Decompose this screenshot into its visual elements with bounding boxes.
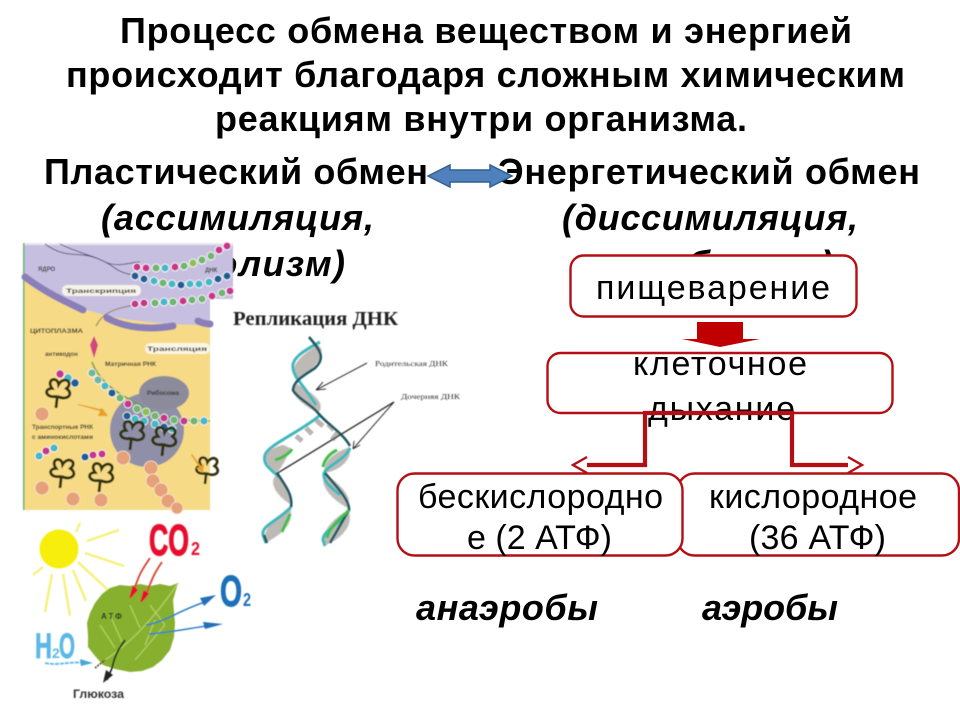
image: photosynthesis leaf: 2 [52, 645, 60, 661]
image: photosynthesis leaf: O [59, 627, 75, 666]
red arrows [134, 558, 162, 598]
dark strands [264, 337, 350, 543]
green daughter strands [275, 449, 349, 538]
oxygen arrows [146, 602, 215, 634]
connector arrows [573, 413, 862, 473]
bead rows [131, 242, 234, 308]
box: oxygen-free: бескислородно [418, 478, 663, 516]
label: aerobes: аэробы [702, 587, 838, 628]
nucleus [24, 243, 233, 325]
box: oxygen-free [398, 474, 682, 557]
labels: ЯДРО [38, 267, 56, 273]
image: photosynthesis leaf: 2 [191, 539, 200, 559]
image: protein synthesis: ДНК [205, 268, 218, 274]
oxygen label: O [220, 567, 242, 616]
tRNA [47, 379, 70, 408]
title: Процесс обмена веществом и энергией [120, 10, 852, 51]
pink arrow [90, 336, 98, 358]
image: photosynthesis leaf: АТФ [101, 612, 122, 621]
label arrows [276, 363, 394, 474]
water label: H [35, 627, 52, 666]
sun [40, 530, 78, 568]
heading: plastic exchange: анаболизм) [126, 243, 345, 284]
heading: plastic exchange: Пластический обмен [44, 151, 428, 192]
image: protein synthesis: Матричная РНК [105, 362, 156, 368]
box: oxygen-free: е (2 АТФ) [467, 519, 612, 557]
title: реакциям внутри организма. [215, 98, 747, 139]
water arrow [45, 663, 85, 664]
carbon dioxide label: CO [149, 516, 189, 565]
heading: energy exchange [498, 151, 920, 284]
box: digestion: пищеварение [596, 269, 830, 307]
helix lobes [265, 345, 350, 545]
title: происходит благодаря сложным химическим [66, 54, 905, 95]
orange arrows [78, 404, 108, 416]
ribosome [110, 393, 184, 467]
image: protein synthesis [23, 242, 234, 514]
image: DNA replication [233, 308, 460, 546]
image: protein synthesis: Транспортные РНК [32, 425, 93, 431]
box: cellular respiration: клеточное [633, 345, 807, 383]
mRNA [92, 362, 210, 421]
double arrow [428, 165, 512, 187]
image: protein synthesis: с аминокислотами [32, 435, 93, 441]
label: anaerobes: анаэробы [416, 587, 598, 628]
teal strands [263, 342, 350, 546]
title [66, 10, 905, 139]
image: protein synthesis: ЦИТОПЛАЗМА [30, 329, 84, 335]
heading: plastic exchange [44, 151, 428, 284]
box: oxygen [678, 474, 959, 557]
box: oxygen: кислородное [709, 478, 917, 516]
box: digestion [570, 256, 856, 316]
leaf [87, 583, 178, 672]
glucose arrow [107, 640, 125, 680]
image: DNA replication: Дочерняя ДНК [401, 393, 460, 401]
heading: plastic exchange: (ассимиляция, [101, 197, 374, 238]
box: cellular respiration [548, 345, 892, 428]
image: protein synthesis: антикодон [45, 352, 78, 358]
image: protein synthesis: Рибосома [147, 390, 180, 397]
box: cellular respiration: дыхание [648, 390, 795, 428]
glucose label: Глюкоза [73, 687, 124, 701]
image: DNA replication: Родительская ДНК [375, 360, 448, 368]
box: oxygen: (36 АТФ) [749, 519, 886, 557]
sun rays [33, 523, 124, 616]
heading: energy exchange: (диссимиляция, [562, 197, 858, 238]
caption: Репликация ДНК [233, 308, 399, 330]
image: protein synthesis: Трансляция [147, 347, 208, 353]
image: photosynthesis leaf: 2 [243, 590, 251, 610]
amino acids [35, 407, 183, 514]
image: photosynthesis leaf [33, 516, 251, 701]
heading: energy exchange: катаболизм) [597, 243, 833, 284]
heading: energy exchange: Энергетический обмен [498, 151, 920, 192]
image: protein synthesis: Транскрипция [66, 289, 137, 295]
block arrow down [682, 322, 760, 347]
fork base pairs [296, 420, 338, 441]
